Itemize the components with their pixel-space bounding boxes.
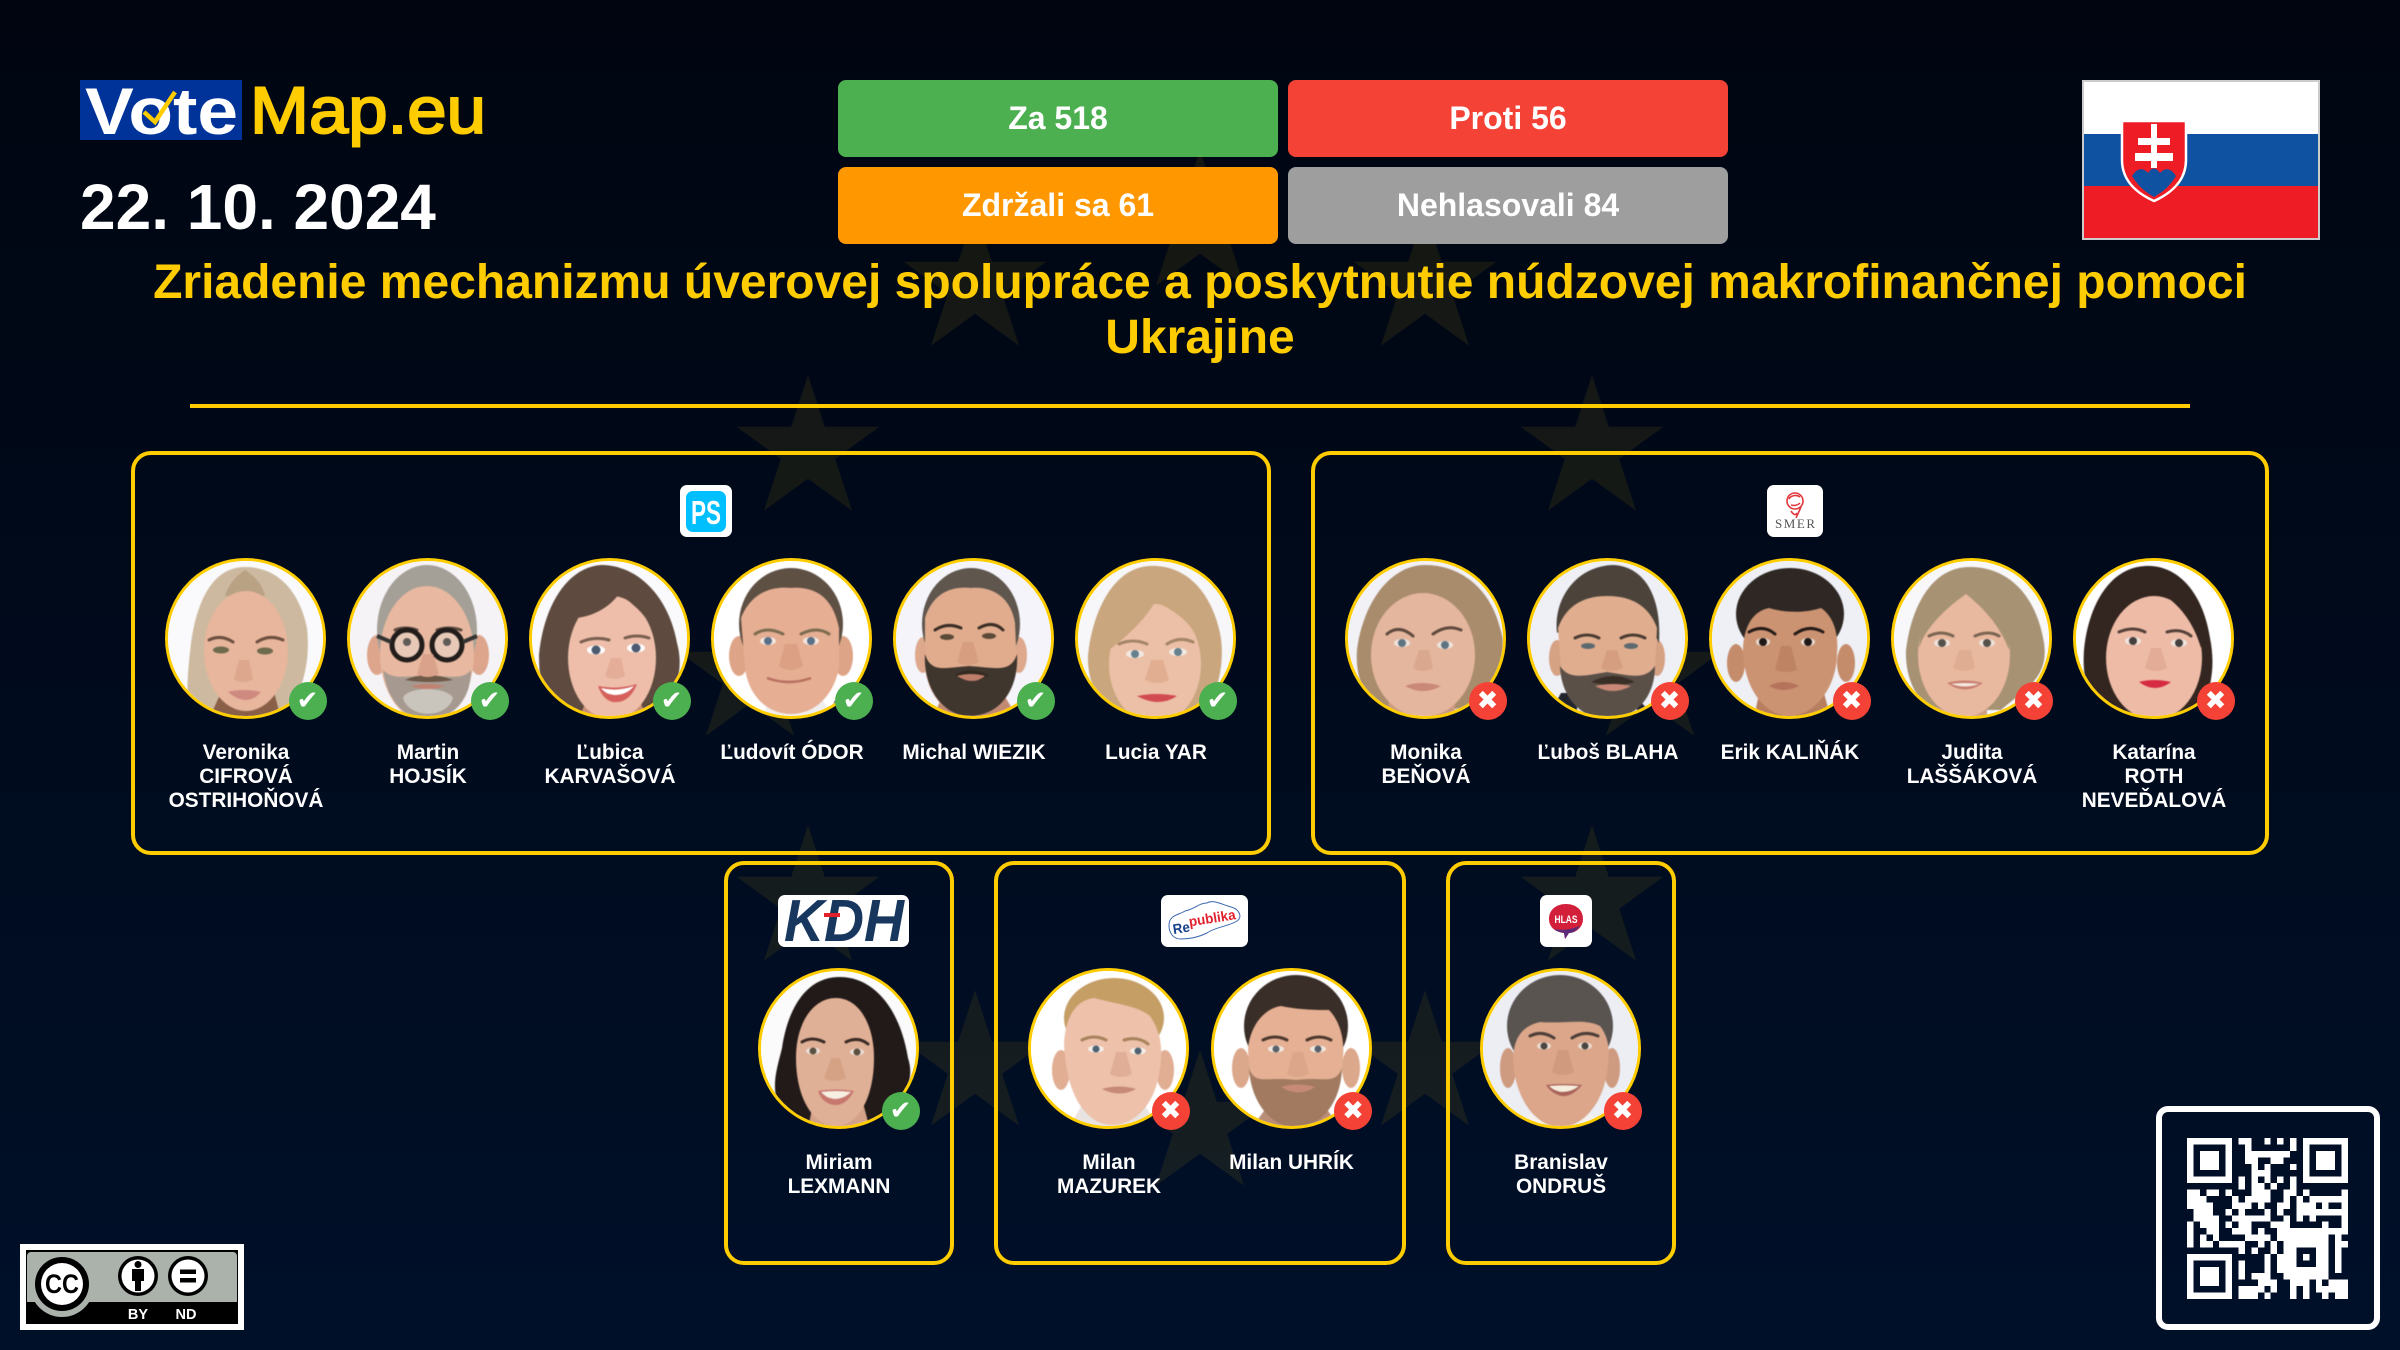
icon: SMER party logo: SMER	[1775, 516, 1815, 531]
vote badge	[1650, 682, 1688, 720]
vote badge	[470, 682, 508, 720]
member: Milan Mazurek, against	[1028, 968, 1190, 1198]
name	[788, 1151, 890, 1198]
name: Branislav	[1514, 1151, 1608, 1174]
name	[1514, 1151, 1608, 1198]
name: ONDRUŠ	[1516, 1175, 1606, 1198]
panel: SMER group	[1311, 451, 2269, 855]
name	[1057, 1151, 1161, 1198]
member: Judita Laššáková, against	[1891, 558, 2053, 788]
name: Judita	[1941, 741, 2003, 764]
vote badge: ✔	[843, 686, 864, 716]
name: OSTRIHOŇOVÁ	[169, 789, 323, 812]
portrait	[347, 558, 508, 719]
name: LEXMANN	[788, 1175, 890, 1198]
panel: Republika group	[994, 861, 1406, 1265]
title: Zriadenie mechanizmu úverovej spolupráce a poskytnutie núdzovej makrofinančnej pomoci	[153, 256, 2247, 309]
icon: Republika party logo: Re	[1172, 919, 1191, 937]
icon: PS party logo	[680, 485, 732, 537]
portrait	[1028, 968, 1189, 1129]
name: Milan	[1082, 1151, 1136, 1174]
vote badge	[1334, 1092, 1372, 1130]
vote count: for	[838, 80, 1278, 157]
vote badge: ✖	[2205, 686, 2226, 716]
portrait	[1527, 558, 1688, 719]
name	[1907, 741, 2037, 788]
portrait	[2073, 558, 2234, 719]
vote badge	[882, 1092, 920, 1130]
portrait	[1480, 968, 1641, 1129]
icon: Slovak flag	[2082, 80, 2320, 240]
vote badge: ✖	[1160, 1096, 1181, 1126]
name: Katarína	[2112, 741, 2196, 764]
vote count: for: Za 518	[1008, 100, 1108, 136]
name: Ľudovít ÓDOR	[720, 741, 864, 764]
member: Michal Wiezik, for	[893, 558, 1055, 764]
vote badge: ✖	[1841, 686, 1862, 716]
portrait	[1709, 558, 1870, 719]
member: Katarína Roth Neveďalová, against	[2073, 558, 2235, 812]
name	[545, 741, 675, 788]
vote count: abstained	[838, 167, 1278, 244]
vote count: abstained: Zdržali sa 61	[962, 187, 1154, 223]
vote badge	[2196, 682, 2234, 720]
license badge: CC BY-ND: CC	[45, 1269, 79, 1299]
name: Martin	[397, 741, 459, 764]
portrait	[1210, 968, 1372, 1129]
icon: HLAS party logo: HLAS	[1554, 914, 1578, 926]
name: Monika	[1390, 741, 1462, 764]
vote badge	[1198, 682, 1236, 720]
portrait	[529, 558, 690, 719]
vote badge	[834, 682, 872, 720]
portrait	[893, 558, 1054, 719]
vote count: did not vote: Nehlasovali 84	[1397, 187, 1619, 223]
vote badge: ✖	[1659, 686, 1680, 716]
vote badge: ✔	[1025, 686, 1046, 716]
name: KARVAŠOVÁ	[545, 765, 675, 788]
vote badge	[1604, 1092, 1642, 1130]
license badge: CC BY-ND: BY	[128, 1307, 148, 1323]
vote badge: ✖	[1342, 1096, 1364, 1126]
portrait	[1891, 558, 2052, 719]
vote badge: ✖	[1477, 686, 1498, 716]
vote badge	[1152, 1092, 1190, 1130]
title: Ukrajine	[1105, 311, 1295, 364]
portrait	[1345, 558, 1506, 719]
license badge: CC BY-ND: ND	[176, 1307, 196, 1323]
panel: PS group	[131, 451, 1271, 855]
member: Milan Uhrík, against	[1211, 968, 1372, 1174]
vote badge	[1832, 682, 1870, 720]
portrait	[165, 558, 326, 719]
icon: HLAS party logo	[1540, 895, 1592, 947]
member: Branislav Ondruš, against	[1480, 968, 1642, 1198]
vote badge: ✔	[1207, 686, 1228, 716]
member: Erik Kaliňák, against	[1709, 558, 1871, 764]
name	[389, 741, 467, 788]
name: Milan UHRÍK	[1229, 1151, 1354, 1174]
member: Miriam Lexmann, for	[758, 968, 920, 1198]
member: Martin Hojsík, for	[347, 558, 509, 788]
QR code	[2156, 1106, 2380, 1330]
name: HOJSÍK	[389, 765, 467, 788]
logo: VoteMap.eu	[80, 80, 486, 148]
vote badge: ✔	[479, 686, 500, 716]
icon: Republika party logo: publika	[1188, 906, 1237, 929]
icon: SMER party logo	[1767, 485, 1823, 537]
name: MAZUREK	[1057, 1175, 1161, 1198]
name	[1382, 741, 1470, 788]
license badge: CC BY-ND	[20, 1244, 244, 1330]
name: Michal WIEZIK	[902, 741, 1046, 764]
portrait	[711, 558, 872, 719]
vote badge	[288, 682, 326, 720]
date: 22. 10. 2024	[80, 171, 436, 243]
portrait	[1075, 558, 1236, 719]
member: Ľudovít Ódor, for	[711, 558, 873, 764]
name: BEŇOVÁ	[1382, 765, 1470, 788]
name: ROTH	[2125, 765, 2183, 788]
icon: Republika party logo	[1161, 895, 1248, 947]
name: Erik KALIŇÁK	[1721, 741, 1859, 764]
portrait	[758, 968, 919, 1129]
vote badge	[1016, 682, 1054, 720]
name: Miriam	[805, 1151, 873, 1174]
vote count: against: Proti 56	[1449, 100, 1567, 136]
panel: HLAS group	[1446, 861, 1676, 1265]
name: Ľubica	[576, 741, 644, 764]
vote badge	[652, 682, 690, 720]
name: Veronika	[203, 741, 289, 764]
vote badge: ✔	[297, 686, 318, 716]
vote badge: ✔	[890, 1096, 911, 1126]
vote count: against	[1288, 80, 1728, 157]
vote badge: ✖	[2023, 686, 2044, 716]
name: NEVEĎALOVÁ	[2082, 789, 2226, 812]
member: Lucia Yar, for	[1075, 558, 1237, 764]
member: Ľuboš Blaha, against	[1527, 558, 1689, 764]
vote badge	[1468, 682, 1506, 720]
name: Ľuboš BLAHA	[1538, 741, 1678, 764]
member: Ľubica Karvašová, for	[529, 558, 691, 788]
title	[153, 256, 2247, 364]
vote badge	[2014, 682, 2052, 720]
member: Veronika Cifrová Ostrihoňová, for	[165, 558, 327, 812]
vote count: did not vote	[1288, 167, 1728, 244]
vote badge: ✔	[661, 686, 682, 716]
name: CIFROVÁ	[199, 765, 293, 788]
panel: KDH group	[724, 861, 954, 1265]
member: Monika Beňová, against	[1345, 558, 1507, 788]
name: LAŠŠÁKOVÁ	[1907, 765, 2037, 788]
name	[2082, 741, 2226, 812]
vote badge: ✖	[1612, 1096, 1633, 1126]
name: Lucia YAR	[1105, 741, 1207, 764]
name	[169, 741, 323, 812]
